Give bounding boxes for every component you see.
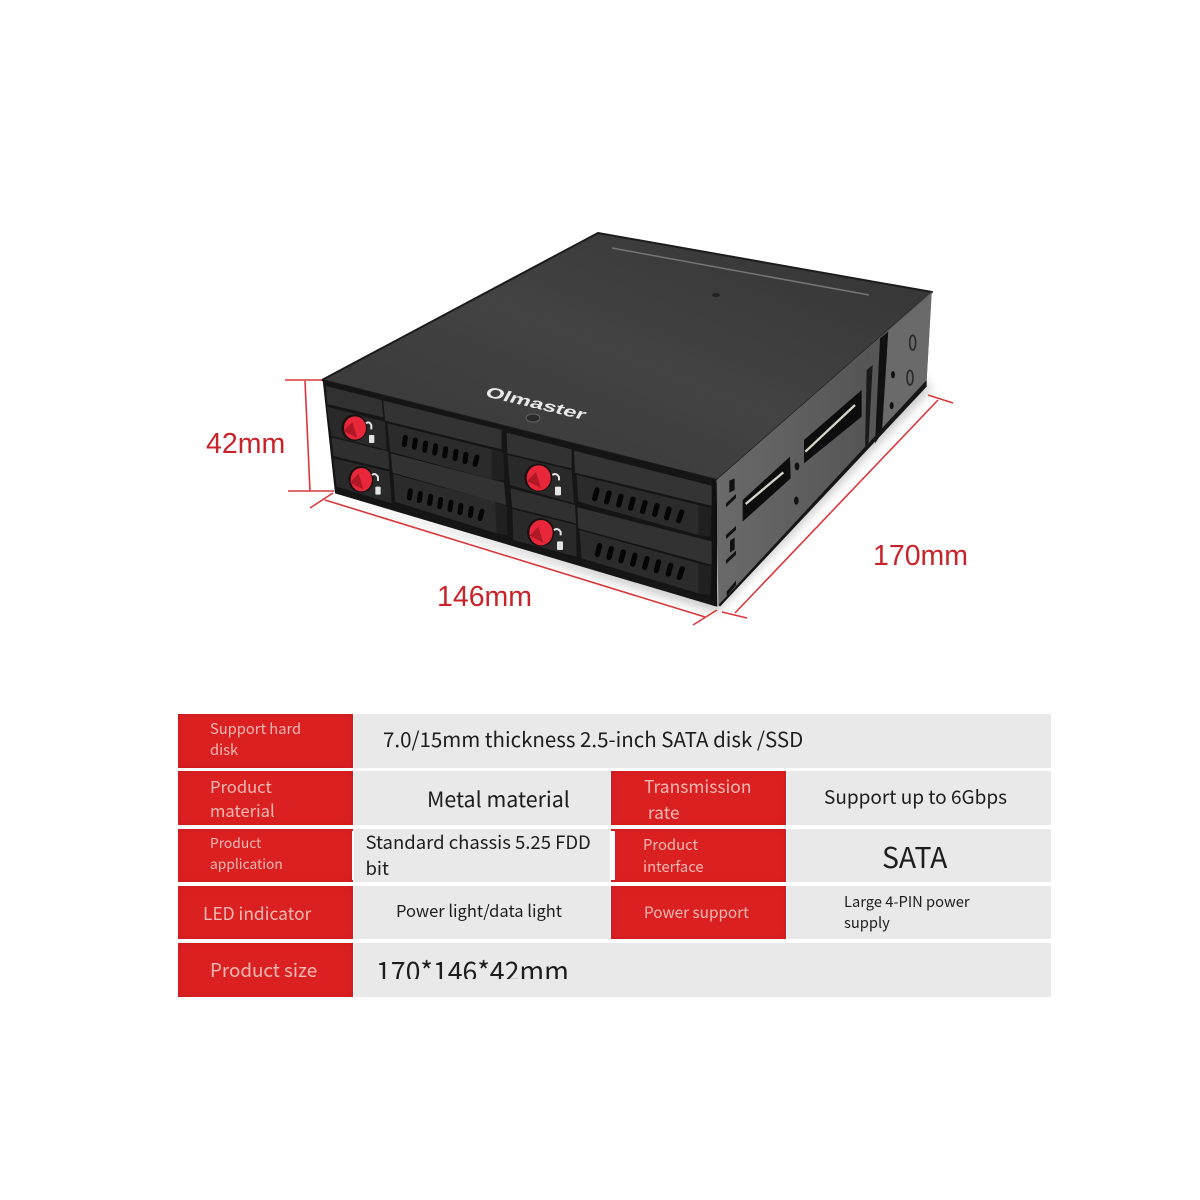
top face [322,233,932,480]
row: support hard disk: Support hard [210,718,301,739]
row: application and interface: Standard chassis 5.25 FDD [366,829,591,855]
tray 3 [507,455,712,537]
row: material and transmission rate: Support up to 6Gbps [824,783,1007,810]
dimension lines [285,380,953,625]
upper strips [326,386,383,417]
row: application and interface: bit [366,855,389,881]
specification table [178,714,1051,997]
row: support hard disk: 7.0/15mm thickness 2.5-inch SATA disk /SSD [383,723,803,753]
row: LED indicator and power support: LED indicator [203,901,311,926]
row: application and interface: Product [643,834,698,855]
row: LED indicator and power support: Power light/data light [396,898,562,922]
row: material and transmission rate [178,771,1051,825]
row: support hard disk [178,714,1051,768]
device shadow [335,378,930,612]
row: LED indicator and power support [178,886,1051,939]
row: LED indicator and power support: Power support [644,901,749,923]
row: application and interface: SATA [882,836,947,877]
side panel with connector slots [717,292,932,607]
row: product size [178,943,1051,997]
row: LED indicator and power support: Large 4-PIN power [844,891,970,912]
connector slot 2 [804,390,862,463]
row: material and transmission rate: Metal material [427,783,570,814]
tray 1 [327,407,504,480]
dimension label: 146mm: 146mm [437,581,532,613]
device: hard drive enclosure [322,233,932,607]
row: support hard disk: disk [210,739,238,760]
row: material and transmission rate: rate [648,800,680,825]
front panel with four drive trays [323,380,717,607]
row: LED indicator and power support: supply [844,912,890,933]
white edge notches around the application value cell [352,831,354,880]
row: application and interface: application [210,853,283,873]
row: application and interface: Product [210,832,261,852]
connector slot 1 [743,457,791,522]
brand logo: Olmaster [482,384,590,423]
row: application and interface: interface [643,856,704,877]
row: product size: Product size [210,956,317,983]
row: material and transmission rate: Transmission [644,774,751,799]
tray 2 [333,458,507,535]
row: material and transmission rate: material [210,798,275,822]
dimension label: 170mm: 170mm [873,540,968,572]
row: material and transmission rate: Product [210,774,272,798]
row: application and interface [178,829,1051,882]
product illustration with dimensions [206,232,968,626]
dimension label: 42mm: 42mm [206,428,285,460]
tray 4 [512,509,712,595]
